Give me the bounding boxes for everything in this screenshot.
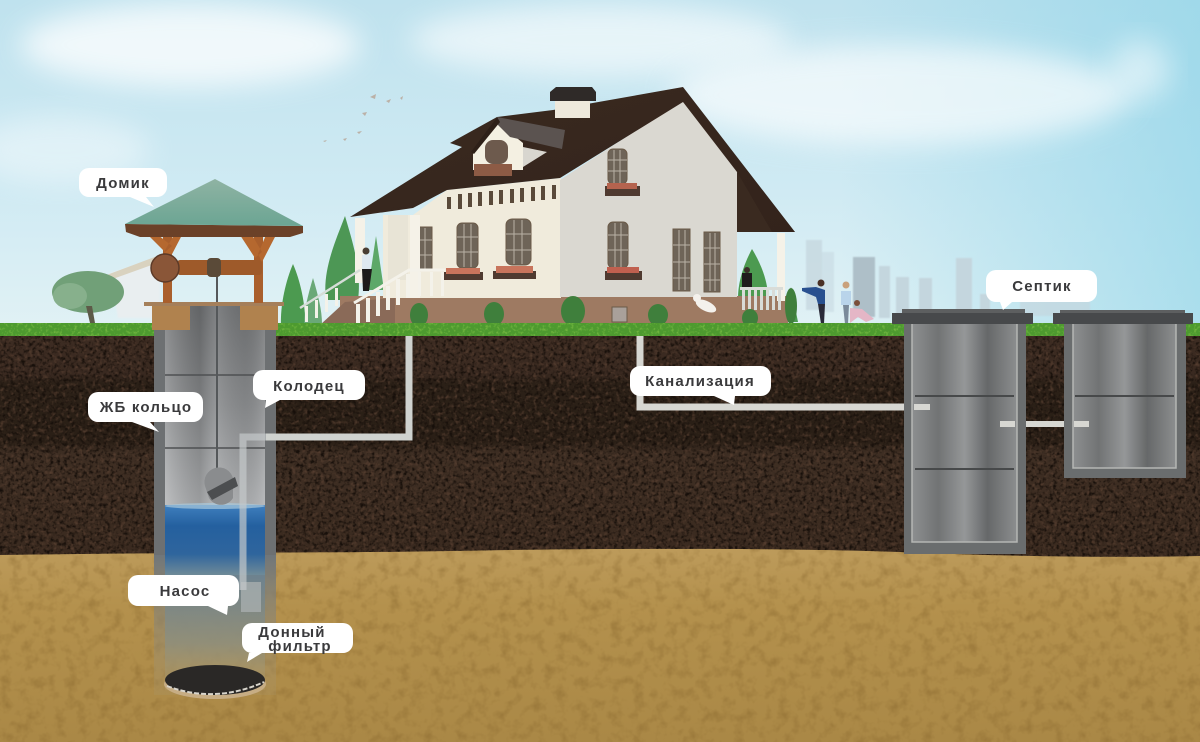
septic tank one bbox=[892, 309, 1033, 554]
label: Насос bbox=[128, 575, 239, 615]
family running bbox=[802, 280, 874, 324]
gazebo: roof bbox=[125, 179, 303, 226]
house: dormer bbox=[471, 117, 565, 176]
house: window glazing bars bbox=[418, 150, 720, 291]
gazebo over the well bbox=[125, 179, 303, 330]
water pipe to the house bbox=[266, 336, 409, 437]
house: porch ceiling bbox=[737, 172, 795, 232]
house: small shrubs bbox=[410, 288, 797, 327]
house: gable wall bbox=[560, 100, 737, 297]
sky with clouds bbox=[0, 0, 1200, 340]
sand layer bbox=[0, 548, 1200, 742]
trees near the house bbox=[281, 216, 798, 326]
distant city skyline bbox=[806, 240, 1090, 319]
well: bucket bbox=[204, 467, 238, 505]
birds bbox=[323, 94, 403, 142]
septic two: joint bbox=[1075, 395, 1174, 397]
septic tank two bbox=[1053, 310, 1193, 478]
house: porch columns bbox=[355, 215, 785, 301]
house: staircase with railings bbox=[300, 270, 445, 325]
distant house and round tree behind the well bbox=[52, 255, 160, 323]
label: Донный фильтр bbox=[242, 623, 353, 662]
septic one: shell bbox=[904, 322, 1026, 554]
soil layers bbox=[0, 336, 1200, 561]
house: brick plinth bbox=[340, 296, 788, 326]
well: interior bbox=[165, 305, 265, 505]
label: Септик bbox=[986, 270, 1097, 310]
well: shaft walls bbox=[154, 305, 276, 555]
well: ring joints bbox=[165, 375, 265, 448]
person behind railing bbox=[742, 267, 752, 287]
house bbox=[300, 87, 797, 327]
label: Донный фильтр: фильтр bbox=[268, 638, 332, 655]
septic two: shell bbox=[1064, 322, 1186, 478]
label: Домик: Домик bbox=[96, 175, 150, 192]
label: ЖБ кольцо bbox=[88, 392, 203, 432]
gazebo: eave band bbox=[125, 224, 303, 237]
well bbox=[154, 262, 276, 699]
label: Колодец bbox=[253, 370, 365, 408]
house: cream front wall bbox=[383, 178, 561, 298]
connecting pipes between tanks bbox=[914, 404, 1089, 427]
gazebo: stone rim bbox=[144, 302, 284, 330]
label: Септик: Септик bbox=[1012, 278, 1072, 295]
man on the porch bbox=[362, 248, 372, 291]
label: ЖБ кольцо: ЖБ кольцо bbox=[99, 399, 192, 416]
house: windows bbox=[418, 149, 720, 322]
well: rope bbox=[216, 262, 218, 478]
well: pump bbox=[241, 582, 261, 612]
dog bbox=[693, 294, 718, 315]
septic one: joints bbox=[915, 396, 1014, 469]
house: frieze brackets bbox=[447, 185, 556, 209]
label: Канализация bbox=[630, 366, 771, 405]
septic two: lid bbox=[1053, 310, 1193, 324]
sewer pipe bbox=[640, 336, 905, 407]
well: water bbox=[165, 505, 265, 575]
label: Колодец: Колодец bbox=[273, 378, 345, 395]
well: bottom filter bbox=[164, 665, 266, 699]
house: flower boxes bbox=[443, 183, 642, 280]
label: Насос: Насос bbox=[160, 583, 210, 600]
house: right railing bbox=[740, 287, 783, 310]
grass strip bbox=[0, 323, 1200, 337]
septic one: lid bbox=[892, 309, 1033, 324]
septic two: interior bbox=[1073, 323, 1176, 468]
water pipe inside well bbox=[243, 437, 266, 590]
gazebo: posts and beam bbox=[148, 232, 276, 303]
well: lower section bbox=[165, 575, 265, 690]
label: Донный фильтр: Донный bbox=[258, 624, 326, 641]
gazebo: wheel bbox=[151, 254, 179, 282]
house: main roof bbox=[350, 87, 795, 232]
label: Канализация: Канализация bbox=[645, 373, 755, 390]
label: Домик bbox=[79, 168, 167, 207]
septic one: interior bbox=[912, 323, 1017, 542]
house: chimney bbox=[550, 87, 596, 118]
